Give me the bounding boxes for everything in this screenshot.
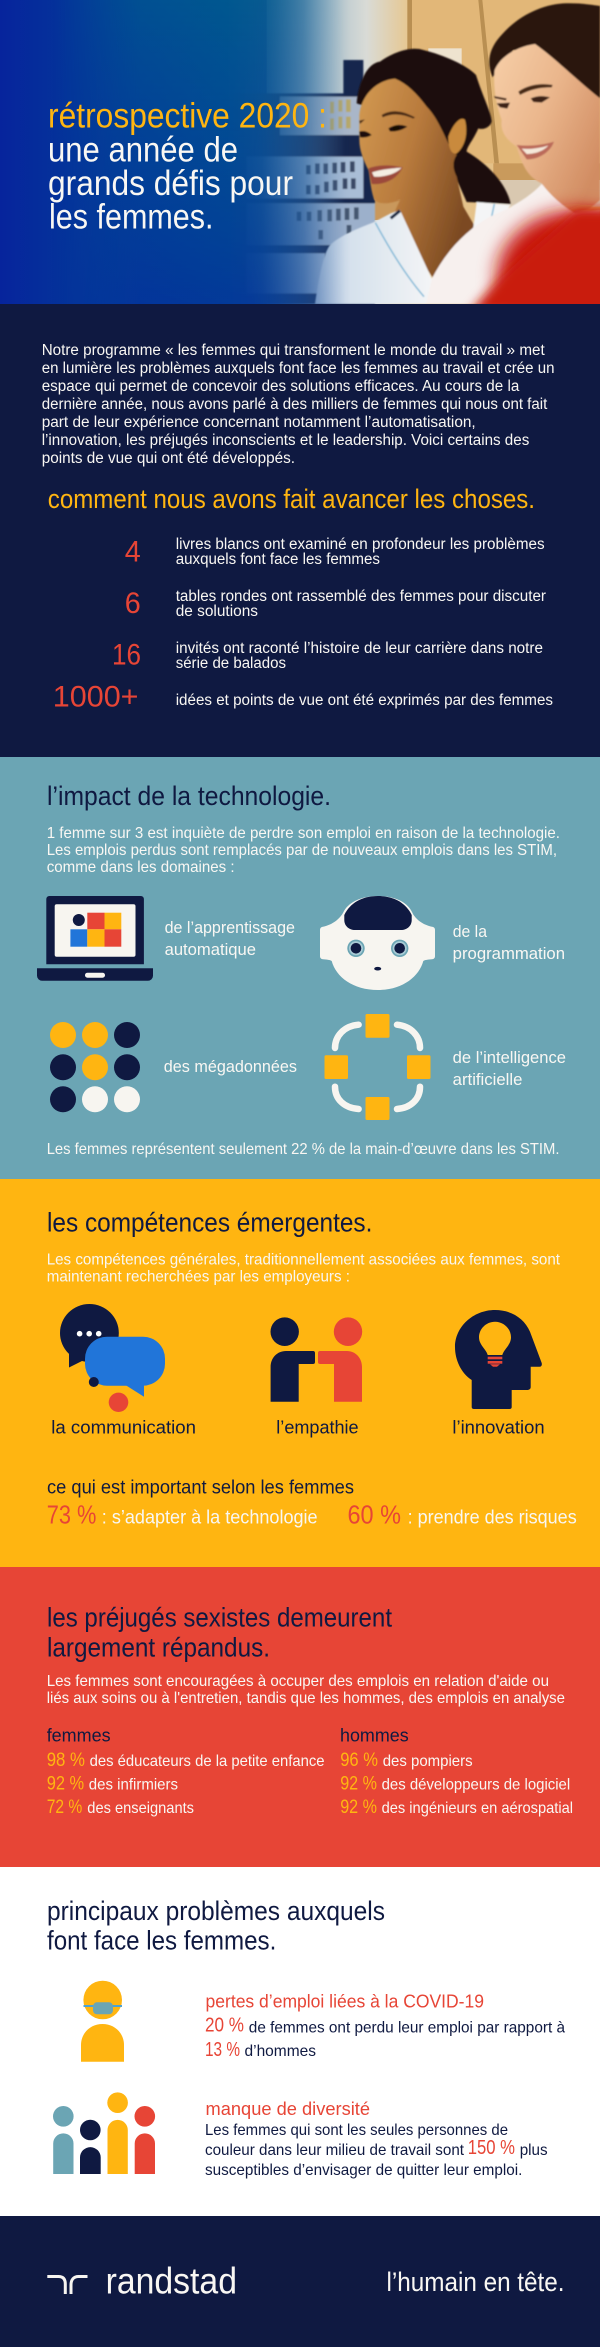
- panel: main problems: [0, 1867, 600, 2216]
- label: de la programmation: programmation: [453, 945, 565, 963]
- woman 1 hair: [357, 49, 511, 204]
- text: lack of diversity: couleur dans leur milieu de travail sont: [205, 2142, 465, 2159]
- title: les femmes.: [49, 196, 214, 236]
- blue gradient overlay: [0, 0, 345, 304]
- text: COVID-19 job losses: d’hommes: [244, 2043, 316, 2060]
- heading: l'impact de la technologie: l’impact de la technologie.: [47, 781, 331, 811]
- label: de la programmation: [453, 923, 565, 963]
- list: femmes: des éducateurs de la petite enfance: [90, 1753, 325, 1770]
- text: COVID-19 job losses: de femmes ont perdu leur emploi par rapport à: [249, 2019, 565, 2036]
- woman 2 hair: [489, 3, 600, 98]
- heading: les préjugés sexistes: [47, 1603, 392, 1663]
- list: femmes: femmes: [47, 1726, 111, 1746]
- stat: 16: invités ont raconté l’histoire de leur carrière dans notre: [176, 640, 543, 657]
- stat: 6: de solutions: [176, 603, 258, 620]
- stat: 60 %: 60 %: [348, 1499, 401, 1529]
- title: rétrospective 2020 :: [48, 96, 327, 136]
- stat: 1000+: 1000+: [53, 681, 138, 714]
- label: de l'intelligence artificielle: artificielle: [453, 1071, 522, 1089]
- title: une année de: [48, 130, 238, 170]
- label: l'empathie: l’empathie: [276, 1416, 359, 1437]
- stat: 4: livres blancs ont examiné en profondeur les problèmes: [176, 536, 545, 553]
- intro paragraph: espace qui permet de concevoir des solutions efficaces. Au cours de la: [42, 378, 520, 395]
- stat: 73 %: : s’adapter à la technologie: [102, 1506, 318, 1528]
- woman 2 uniform: [426, 184, 600, 304]
- skills paragraph: Les compétences générales, traditionnellement associées aux femmes, sont: [47, 1251, 561, 1268]
- list: hommes: des pompiers: [383, 1753, 473, 1770]
- stat: 6: 6: [125, 587, 141, 620]
- skills paragraph: maintenant recherchées par les employeurs :: [47, 1268, 350, 1285]
- label: des mégadonnées: des mégadonnées: [164, 1058, 297, 1076]
- title: grands défis pour: [48, 163, 293, 203]
- heading: comment nous avons fait avancer les choses: comment nous avons fait avancer les choses.: [48, 484, 535, 514]
- photo: two smiling women: [262, 0, 600, 304]
- label: de l'intelligence artificielle: de l’intelligence: [453, 1049, 566, 1067]
- heading: les préjugés sexistes: les préjugés sexistes demeurent: [47, 1603, 392, 1633]
- stat: 60 %: [348, 1499, 577, 1529]
- panel: introduction: [0, 304, 600, 757]
- technology paragraph: 1 femme sur 3 est inquiète de perdre son emploi en raison de la technologie.: [47, 825, 560, 842]
- panel: emerging skills: [0, 1179, 600, 1567]
- label: de la programmation: de la: [453, 923, 488, 941]
- list: hommes: des développeurs de logiciel: [382, 1776, 570, 1793]
- heading: principaux problèmes: [47, 1896, 385, 1955]
- label: de l'intelligence artificielle: [453, 1049, 566, 1089]
- text: COVID-19 job losses: 13 %: [205, 2039, 240, 2061]
- closing statement: Les femmes représentent seulement 22 % de la main-d’œuvre dans les STIM.: [47, 1141, 559, 1158]
- intro paragraph: l’innovation, les préjugés inconscients et le leadership. Voici certains des: [42, 432, 530, 449]
- icon: artificial intelligence network: [324, 1014, 430, 1120]
- stat: 73 %: [47, 1499, 318, 1529]
- text: lack of diversity: [205, 2098, 548, 2179]
- skills paragraph: [47, 1251, 561, 1285]
- text: lack of diversity: plus: [520, 2142, 548, 2159]
- label: de l'apprentissage automatique: [165, 919, 295, 959]
- heading: principaux problèmes: principaux problèmes auxquels: [47, 1896, 385, 1926]
- text: lack of diversity: manque de diversité: [206, 2098, 370, 2119]
- stat: 60 %: : prendre des risques: [408, 1506, 577, 1528]
- stat: 16: 16: [112, 639, 141, 672]
- stat: 1000+: idées et points de vue ont été exprimés par des femmes: [176, 692, 553, 709]
- list: hommes: 96 %: [340, 1749, 378, 1771]
- subheading: ce qui est important selon les femmes: ce qui est important selon les femmes: [47, 1477, 354, 1498]
- tagline: l’humain en tête.: [386, 2267, 564, 2297]
- intro paragraph: Notre programme « les femmes qui transforment le monde du travail » met: [42, 342, 545, 359]
- list: hommes: 92 %: [340, 1796, 377, 1818]
- list: hommes: hommes: [340, 1726, 409, 1746]
- panel: footer: [0, 2216, 600, 2347]
- icon: four diverse people: [53, 2092, 155, 2174]
- icon: robot head: [320, 896, 435, 990]
- intro paragraph: points de vue qui ont été développés.: [42, 450, 295, 467]
- woman 1 uniform: [315, 202, 511, 304]
- technology paragraph: comme dans les domaines :: [47, 859, 235, 876]
- intro paragraph: en lumière les problèmes auxquels font face les femmes au travail et crée un: [42, 360, 554, 377]
- list: femmes: des infirmiers: [89, 1776, 178, 1793]
- text: lack of diversity: susceptibles d’envisager de quitter leur emploi.: [205, 2162, 522, 2179]
- text: lack of diversity: 150 %: [468, 2137, 515, 2159]
- panel: hero: [0, 0, 600, 304]
- heading: les préjugés sexistes: largement répandus.: [47, 1633, 270, 1663]
- intro paragraph: dernière année, nous avons parlé à des milliers de femmes qui nous ont fait: [42, 396, 548, 413]
- icon: speech bubbles: [60, 1304, 165, 1412]
- woman 2 face: [494, 44, 600, 213]
- icon: two people empathy: [270, 1317, 362, 1402]
- panel: sexist biases: [0, 1567, 600, 1867]
- list: femmes: [47, 1726, 325, 1818]
- stat: 1000+: [53, 681, 553, 714]
- text: lack of diversity: Les femmes qui sont les seules personnes de: [205, 2122, 508, 2139]
- icon: head with light bulb: [455, 1310, 542, 1409]
- stat: 6: [125, 587, 546, 620]
- panel: technology impact: [0, 757, 600, 1179]
- stat: 16: [112, 639, 543, 672]
- list: femmes: 72 %: [47, 1796, 82, 1818]
- bias paragraph: liés aux soins ou à l'entretien, tandis que les hommes, des emplois en analyse: [47, 1690, 565, 1707]
- stat: 4: [125, 536, 545, 569]
- list: hommes: 92 %: [340, 1772, 377, 1794]
- stat: 4: auxquels font face les femmes: [176, 551, 380, 568]
- icon: data dots: [50, 1022, 140, 1112]
- heading: les compétences émergentes: les compétences émergentes.: [47, 1208, 372, 1238]
- logo: randstad: randstad: [106, 2260, 237, 2301]
- intro paragraph: part de leur expérience concernant notamment l’automatisation,: [42, 414, 476, 431]
- text: COVID-19 job losses: pertes d’emploi liées à la COVID-19: [206, 1991, 484, 2012]
- text: COVID-19 job losses: 20 %: [205, 2015, 244, 2037]
- label: de l'apprentissage automatique: automatique: [165, 941, 256, 959]
- heading: principaux problèmes: font face les femmes.: [47, 1925, 276, 1955]
- bias paragraph: [47, 1673, 565, 1707]
- intro paragraph: [42, 342, 554, 467]
- woman 1 face and neck: [359, 79, 475, 278]
- list: femmes: 92 %: [47, 1772, 84, 1794]
- bias paragraph: Les femmes sont encouragées à occuper des emplois en relation d'aide ou: [47, 1673, 549, 1690]
- label: l'innovation: l’innovation: [452, 1416, 545, 1437]
- list: hommes: [340, 1726, 573, 1818]
- label: la communication: la communication: [51, 1416, 196, 1437]
- stat: 4: 4: [125, 536, 141, 569]
- title: [49, 102, 324, 229]
- stat: 73 %: 73 %: [47, 1499, 96, 1529]
- logo: randstad: [47, 2260, 237, 2301]
- icon: person with mask: [81, 1981, 124, 2062]
- red blur foreground: [482, 196, 600, 294]
- stat: 16: série de balados: [176, 655, 286, 672]
- list: femmes: 98 %: [47, 1749, 85, 1771]
- list: femmes: des enseignants: [87, 1800, 194, 1817]
- technology paragraph: Les emplois perdus sont remplacés par de nouveaux emplois dans les STIM,: [47, 842, 557, 859]
- text: COVID-19 job losses: [205, 1991, 565, 2061]
- technology paragraph: [47, 825, 560, 876]
- label: de l'apprentissage automatique: de l’apprentissage: [165, 919, 295, 937]
- list: hommes: des ingénieurs en aérospatial: [382, 1800, 573, 1817]
- stat: 6: tables rondes ont rassemblé des femmes pour discuter: [176, 588, 546, 605]
- icon: laptop: [37, 896, 153, 981]
